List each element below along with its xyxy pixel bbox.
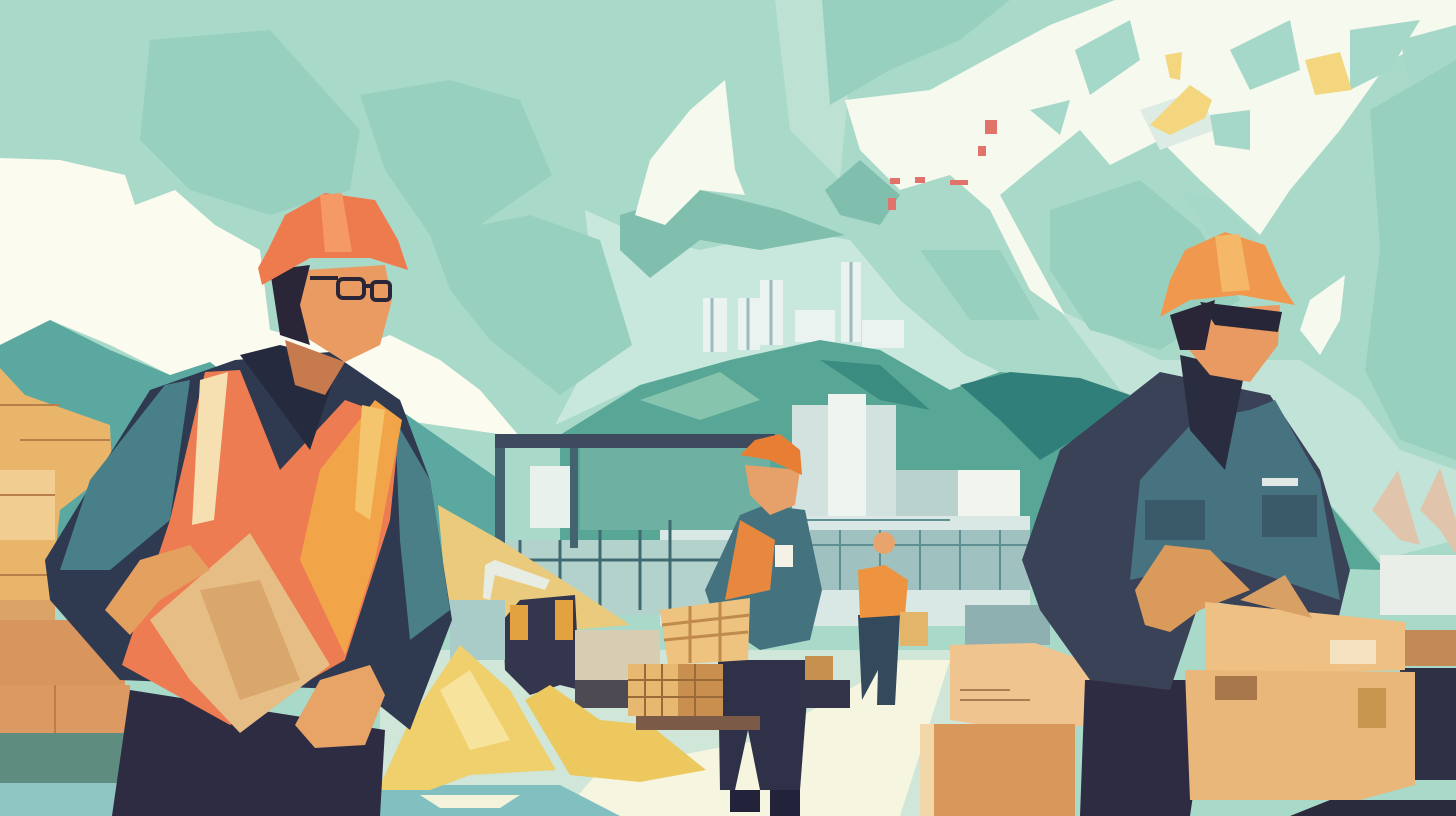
harbour buildings bbox=[660, 394, 1050, 645]
right worker hand bbox=[1135, 545, 1250, 632]
gantry structure bbox=[495, 434, 775, 615]
background worker group bbox=[503, 595, 580, 695]
left worker glasses bbox=[310, 278, 390, 300]
bottom right dark platform bbox=[1290, 800, 1456, 816]
left worker helmet bbox=[258, 193, 408, 285]
map: dark teal continents bbox=[140, 0, 1456, 460]
right worker boxes bbox=[1185, 575, 1415, 800]
cardboard boxes centre right bbox=[920, 643, 1095, 816]
centre worker bbox=[660, 434, 822, 816]
ground bbox=[380, 650, 1000, 816]
left worker package bbox=[150, 533, 330, 733]
right worker trousers bbox=[1080, 680, 1210, 816]
steps and pallet blocks bbox=[450, 600, 660, 708]
right worker chest pockets bbox=[1145, 478, 1317, 540]
back mountains bbox=[0, 320, 1385, 570]
excavator arm bbox=[483, 560, 550, 600]
right worker helmet bbox=[1160, 232, 1295, 317]
distant city on hill bbox=[703, 262, 904, 352]
map: teal islands on white land bbox=[1030, 20, 1456, 250]
sand piles front bbox=[378, 645, 706, 790]
map: white landmasses bbox=[635, 0, 1456, 355]
left worker bbox=[45, 193, 452, 816]
right worker bbox=[1022, 232, 1415, 816]
left worker neck and collar bbox=[240, 345, 340, 450]
right worker neck bbox=[1180, 355, 1245, 470]
map: yellow regions bbox=[1150, 52, 1352, 135]
left brick stack bbox=[0, 368, 130, 816]
left worker teal sleeves bbox=[60, 380, 190, 570]
left worker jacket bbox=[45, 352, 452, 730]
right worker jacket bbox=[1022, 372, 1350, 690]
sand pile back bbox=[438, 505, 630, 640]
map: red markers bbox=[888, 120, 997, 210]
left cloud bbox=[0, 158, 520, 437]
left worker trousers bbox=[112, 690, 385, 816]
left worker face bbox=[290, 265, 392, 362]
left worker hands bbox=[105, 545, 210, 635]
left worker vest bbox=[122, 370, 400, 725]
crates near centre bbox=[628, 656, 850, 730]
right worker face bbox=[1185, 305, 1280, 382]
right edge cranes and truck bbox=[1372, 468, 1456, 780]
far worker bbox=[858, 532, 928, 705]
